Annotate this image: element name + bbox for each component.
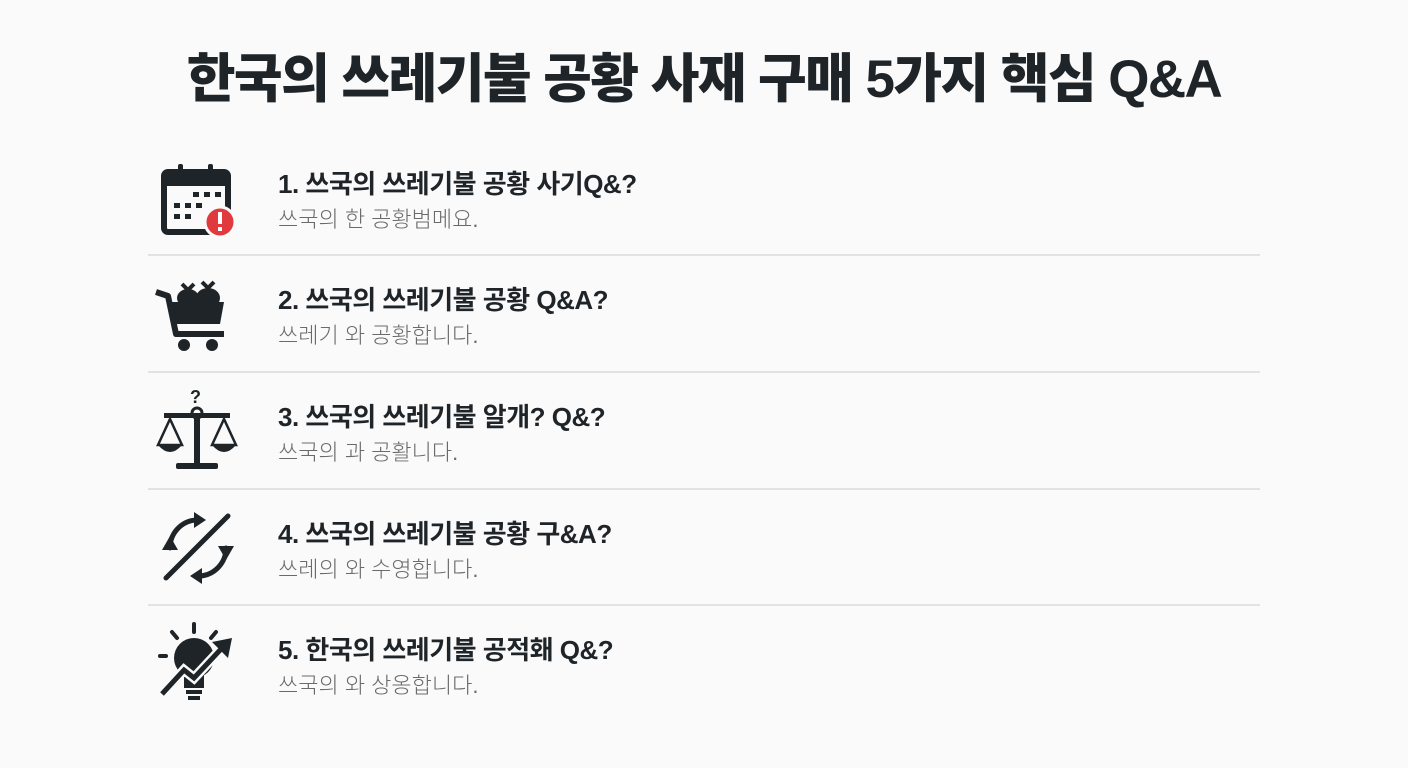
row 1 [161, 164, 637, 236]
icon: balance scale with question mark: ? [190, 387, 201, 407]
subtext 4: 쓰레의 와 수영합니다. [278, 557, 478, 582]
row 3 [156, 387, 605, 469]
icon: balance scale with question mark [156, 387, 238, 469]
subtext 5: 쓰국의 와 상옹합니다. [278, 673, 478, 698]
row 5 [158, 622, 613, 700]
row 2 [155, 280, 608, 351]
subtext 2: 쓰레기 와 공황합니다. [278, 323, 478, 348]
heading 1: 1. 쓰국의 쓰레기불 공황 사기Q&? [278, 169, 637, 199]
heading 2: 2. 쓰국의 쓰레기불 공황 Q&A? [278, 285, 608, 315]
icon: cycle arrows with slash [162, 512, 234, 584]
icon: lightbulb with rising arrow [158, 622, 232, 700]
title: 한국의 쓰레기불 공황 사재 구매 5가지 핵심 Q&A [187, 50, 1221, 109]
subtext 1: 쓰국의 한 공황범메요. [278, 207, 478, 232]
icon: shopping cart with trash bags [155, 280, 224, 351]
heading 5: 5. 한국의 쓰레기불 공적홰 Q&? [278, 635, 613, 665]
subtext 3: 쓰국의 과 공활니다. [278, 440, 458, 465]
row 4 [162, 512, 612, 584]
heading 3: 3. 쓰국의 쓰레기불 알개? Q&? [278, 402, 605, 432]
heading 4: 4. 쓰국의 쓰레기불 공황 구&A? [278, 519, 612, 549]
icon: calendar alert [161, 164, 234, 236]
